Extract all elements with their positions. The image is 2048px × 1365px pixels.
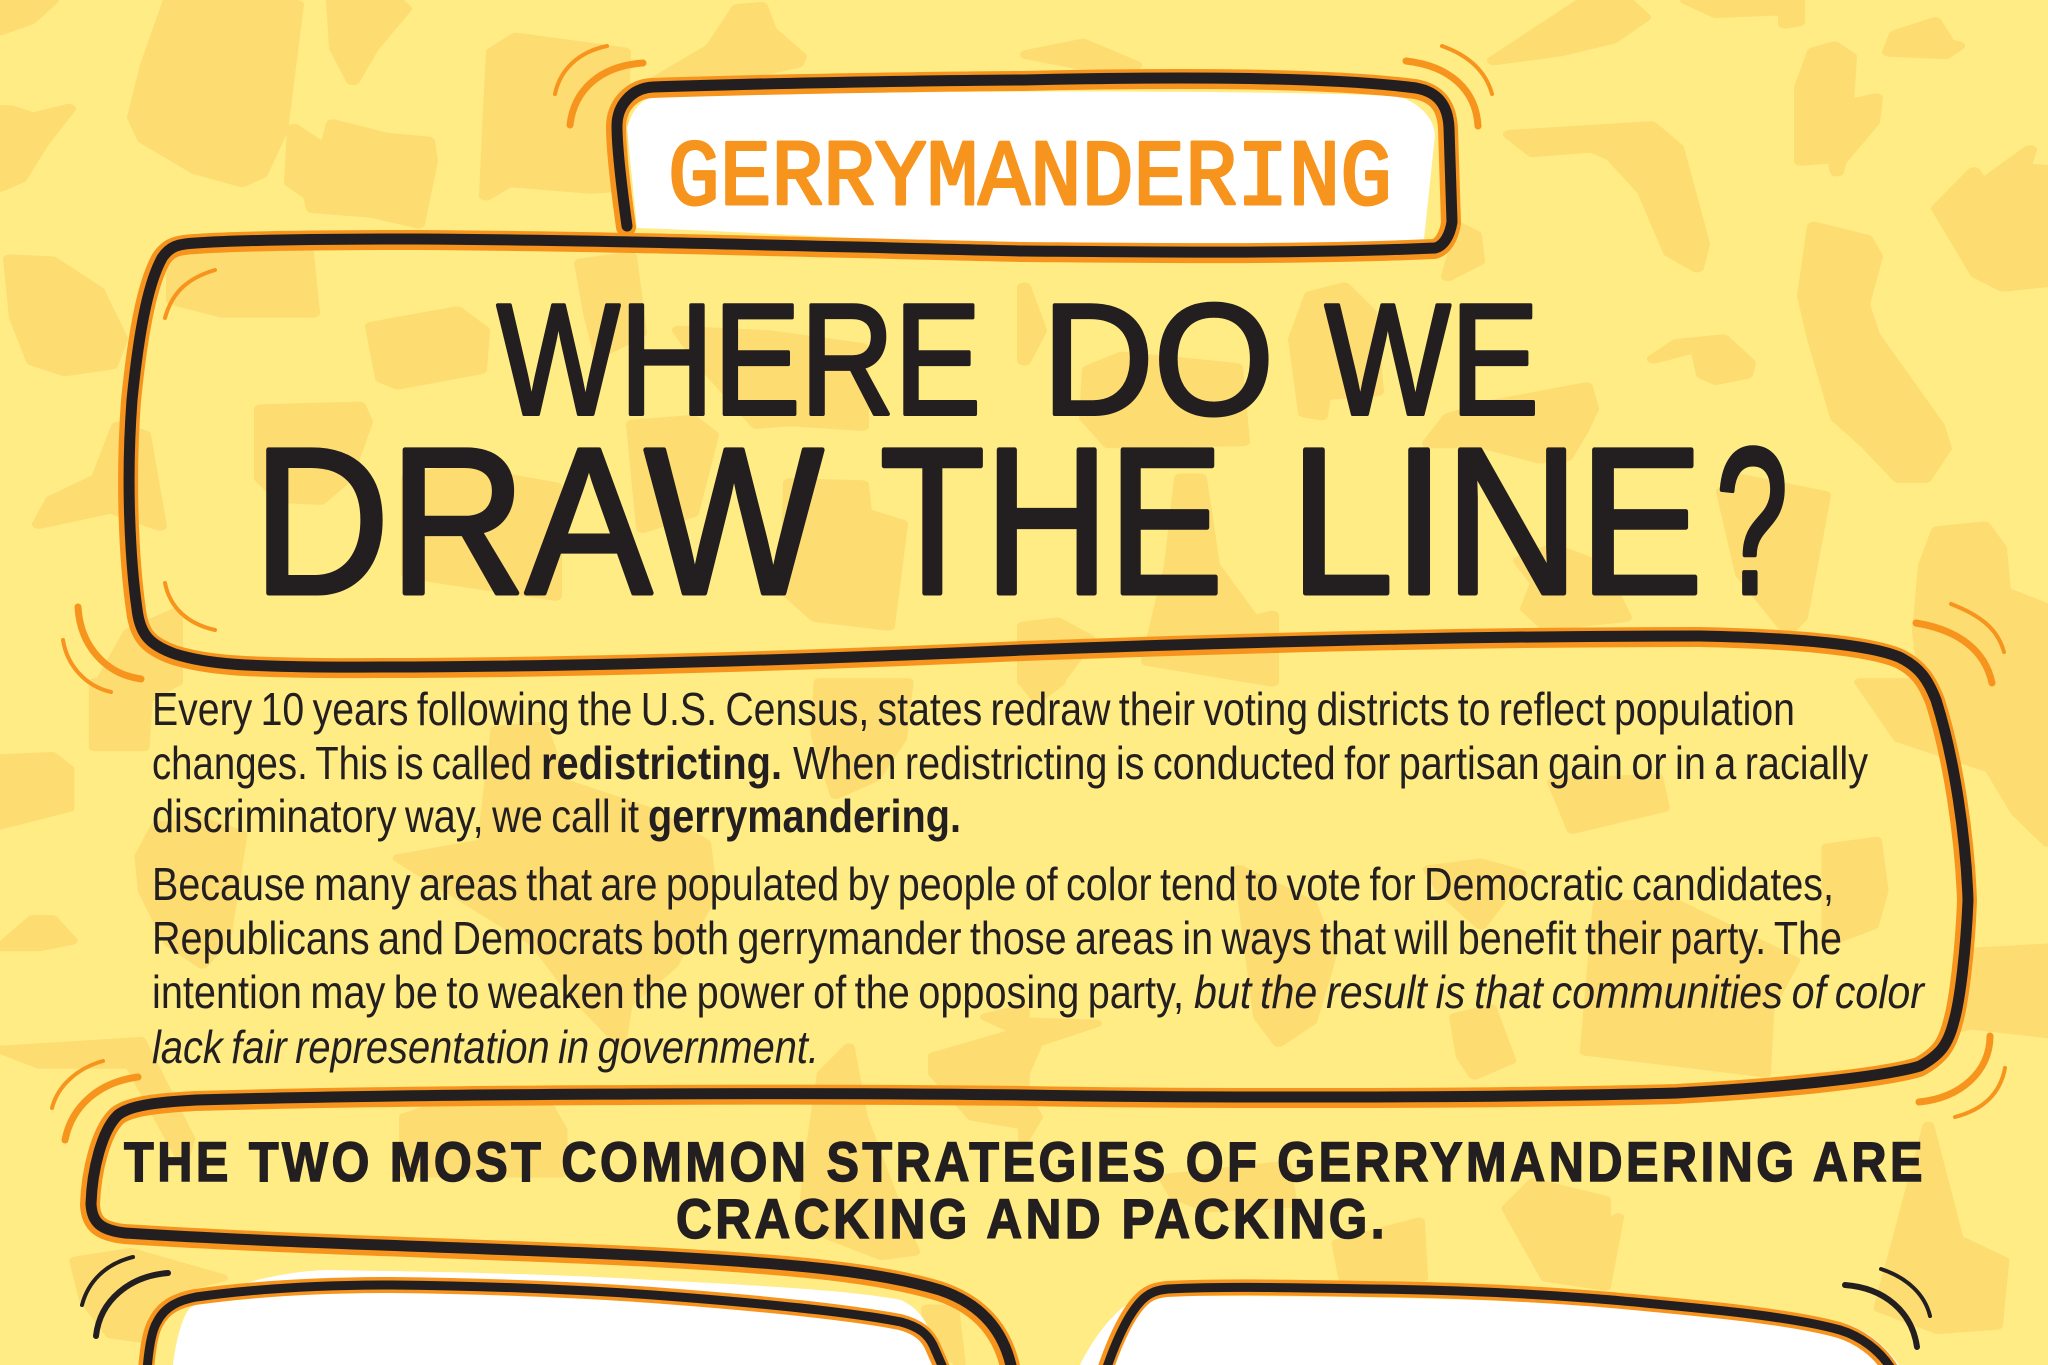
- text block: redistricting definition: Every 10 years following the U.S. Census, states redraw their voting districts to reflect population: [152, 683, 1795, 735]
- title line 1: [497, 272, 1539, 448]
- title line 2: THE: [880, 406, 1223, 638]
- text block: redistricting definition: When redistricting is conducted for partisan gain or in a racially: [793, 737, 1868, 789]
- panel: left white card: [173, 1270, 934, 1365]
- panel: white title tab fill: [627, 91, 1435, 245]
- right card outline: [1105, 1287, 1892, 1365]
- title line 2: [253, 406, 1788, 638]
- text block: partisan impact: [152, 858, 1926, 1073]
- motion ticks: orange corner accents: [52, 46, 2005, 1140]
- title line 1: WHERE: [497, 272, 981, 448]
- text block: redistricting definition: redistricting.: [541, 737, 782, 789]
- text block: redistricting definition: [152, 683, 1868, 842]
- left card outline: [146, 1285, 944, 1365]
- title line 1: WE: [1325, 272, 1539, 448]
- text block: redistricting definition: discriminatory way, we call it: [152, 790, 639, 842]
- text block: redistricting definition: gerrymandering.: [648, 790, 961, 842]
- heading: two strategies: [124, 1130, 1926, 1250]
- text block: redistricting definition: changes. This is called: [152, 737, 532, 789]
- text block: partisan impact: lack fair representation in government.: [152, 1021, 819, 1073]
- title line 1: DO: [1042, 272, 1274, 448]
- motion ticks: black card corner accents: [82, 1257, 1930, 1347]
- heading: two strategies: CRACKING AND PACKING.: [676, 1187, 1388, 1250]
- panel: right white card: [1080, 1296, 1899, 1365]
- kicker: GERRYMANDERING: GERRYMANDERING: [668, 127, 1392, 233]
- title line 2: DRAW: [253, 406, 823, 638]
- title line 2: LINE: [1290, 406, 1703, 638]
- text block: partisan impact: but the result is that communities of color: [1194, 966, 1926, 1018]
- title line 2: ?: [1716, 406, 1788, 638]
- text block: partisan impact: intention may be to weaken the power of the opposing party,: [152, 966, 1184, 1018]
